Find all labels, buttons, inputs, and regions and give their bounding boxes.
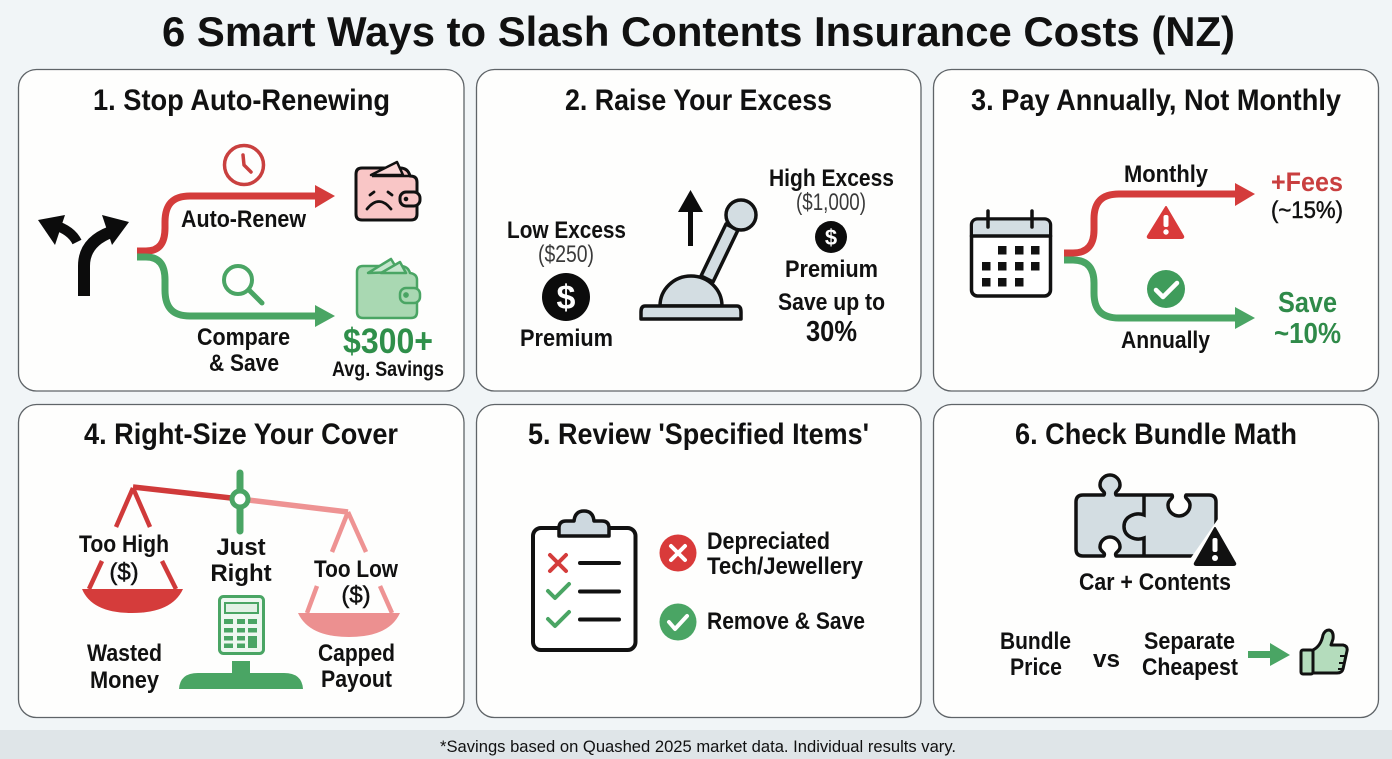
icon: green wallet [357, 259, 420, 318]
icon: small dollar coin: $ [825, 225, 837, 250]
label: too high: Too High [79, 531, 169, 558]
icon: clock [224, 146, 264, 184]
panel: 4. Right-Size Your Cover [18, 404, 464, 718]
label: compare and save [197, 324, 290, 377]
high excess column: ($1,000) [796, 189, 866, 216]
icon: puzzle with warning [1076, 475, 1245, 572]
heading: panel 3: 3. Pay Annually, Not Monthly [971, 84, 1341, 117]
heading: panel 4: 4. Right-Size Your Cover [84, 418, 398, 451]
label: too high [79, 531, 169, 586]
label: just right [210, 534, 272, 587]
label: auto-renew: Auto-Renew [181, 206, 306, 233]
label: bundle price: Price [1010, 654, 1062, 681]
label: just right: Right [210, 560, 272, 587]
stat: fees: (~15%) [1271, 197, 1343, 224]
icon: green check circle [1147, 270, 1185, 308]
stat: save: Save [1278, 287, 1337, 319]
stat: average savings: $300+ [343, 322, 433, 361]
label: wasted money: Money [90, 667, 160, 694]
label: compare and save: Compare [197, 324, 290, 351]
label: bundle price [1000, 628, 1071, 681]
icon: large dollar coin: $ [557, 279, 576, 317]
label: capped payout [318, 640, 395, 693]
icon: calculator on stand [179, 596, 303, 689]
label: vs: vs [1093, 646, 1120, 673]
arrow: annually path [1064, 260, 1255, 329]
low excess column [507, 217, 626, 352]
heading: panel 6: 6. Check Bundle Math [1015, 418, 1297, 451]
label: too low [314, 556, 398, 609]
low excess column: ($250) [538, 241, 594, 268]
icon: calendar [972, 211, 1050, 296]
stat: average savings [332, 322, 444, 381]
label: monthly: Monthly [1124, 161, 1209, 188]
left pan [82, 488, 183, 613]
label: bundle price: Bundle [1000, 628, 1071, 655]
panel: 1. Stop Auto-Renewing [18, 70, 464, 391]
heading: panel 1: 1. Stop Auto-Renewing [93, 84, 390, 117]
label: compare and save: & Save [209, 350, 279, 377]
panel: 6. Check Bundle Math [934, 404, 1378, 718]
label: wasted money: Wasted [87, 640, 162, 667]
low excess column: Premium [520, 325, 613, 352]
label: depreciated items: Tech/Jewellery [707, 553, 864, 580]
label: remove and save: Remove & Save [707, 608, 865, 635]
chart: balance scale [82, 473, 400, 637]
label: separate cheapest: Separate [1144, 628, 1235, 655]
title: 6 Smart Ways to Slash Contents Insurance Costs (NZ) [162, 8, 1235, 55]
label: separate cheapest: Cheapest [1142, 654, 1238, 681]
stat: fees [1271, 167, 1343, 224]
icon: warning triangle [1148, 207, 1183, 238]
panel: 5. Review Specified Items [476, 404, 921, 718]
panel: 2. Raise Your Excess [476, 70, 921, 391]
stat: average savings: Avg. Savings [332, 358, 444, 381]
arrow: to thumbs up [1248, 643, 1290, 666]
stat: fees: +Fees [1271, 167, 1343, 197]
low excess column: Low Excess [507, 217, 626, 244]
stat: save [1274, 287, 1341, 350]
arrow: compare path [137, 257, 335, 327]
label: too high: ($) [109, 559, 139, 586]
label: capped payout: Payout [321, 666, 392, 693]
footnote: *Savings based on Quashed 2025 market data. Individual results vary. [440, 737, 956, 756]
icon: lever [641, 200, 756, 319]
high excess column [769, 165, 894, 348]
high excess column: Save up to [778, 289, 885, 316]
icon: clipboard checklist [533, 511, 636, 650]
footer bar [0, 730, 1392, 759]
high excess column: Premium [785, 256, 878, 283]
icon: magnifier [224, 266, 262, 303]
label: car and contents: Car + Contents [1079, 569, 1231, 596]
panel: 3. Pay Annually, Not Monthly [934, 70, 1378, 391]
icon: red x circle [660, 534, 696, 572]
label: depreciated items [707, 528, 864, 580]
arrow: monthly path [1064, 183, 1255, 253]
label: too low: Too Low [314, 556, 398, 583]
high excess column: 30% [806, 316, 857, 348]
label: separate cheapest [1142, 628, 1238, 681]
icon: fork arrows [38, 215, 129, 296]
icon: green check circle [660, 604, 696, 640]
heading: panel 2: 2. Raise Your Excess [565, 84, 832, 117]
high excess column: High Excess [769, 165, 894, 192]
icon: small dollar coin [815, 221, 847, 253]
label: capped payout: Capped [318, 640, 395, 667]
arrow: auto-renew path [137, 185, 335, 251]
label: depreciated items: Depreciated [707, 528, 830, 555]
heading: panel 5: 5. Review 'Specified Items' [528, 418, 869, 451]
arrow: up [678, 190, 703, 246]
icon: sad wallet [356, 162, 420, 220]
right pan [298, 512, 400, 637]
label: annually: Annually [1121, 327, 1211, 354]
label: too low: ($) [341, 582, 371, 609]
label: wasted money [87, 640, 162, 694]
label: just right: Just [216, 534, 266, 561]
icon: thumbs up [1301, 630, 1347, 674]
stat: save: ~10% [1274, 318, 1341, 350]
